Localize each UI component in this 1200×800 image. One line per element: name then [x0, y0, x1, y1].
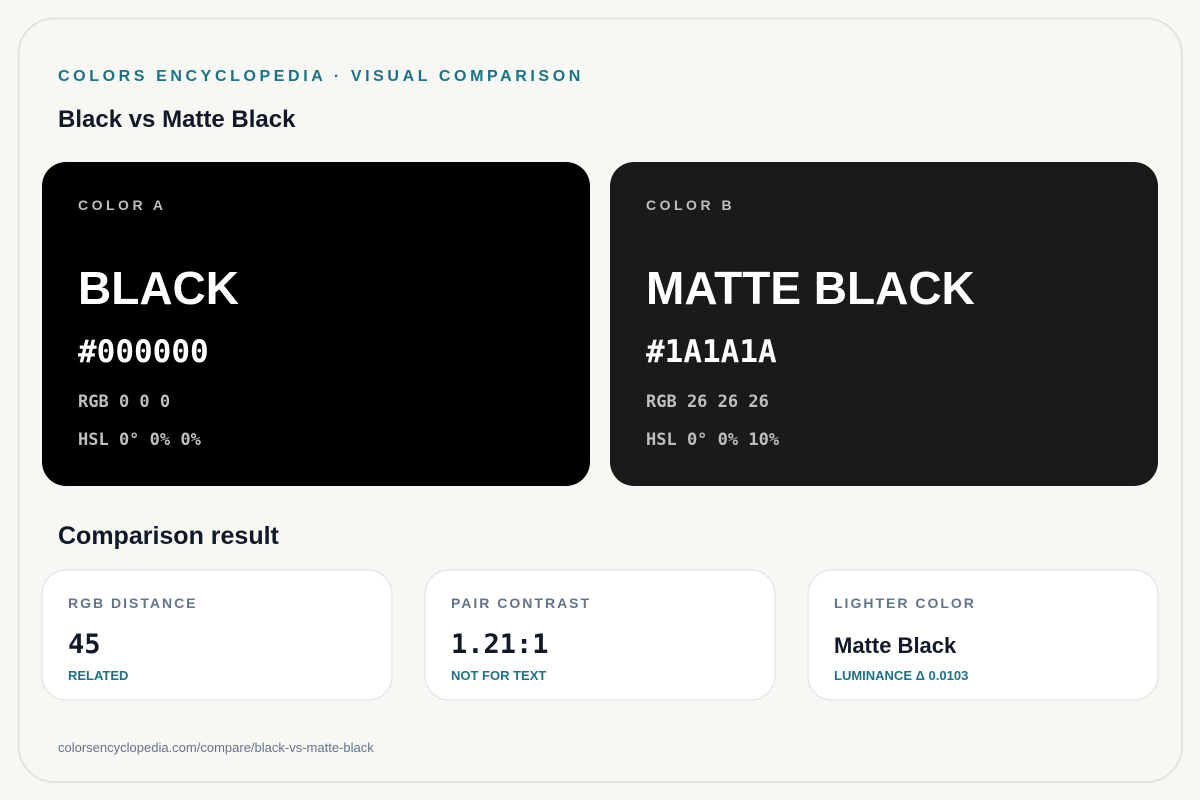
color B HSL: HSL 0° 0% 10%	[646, 430, 779, 450]
card note: RELATED	[68, 668, 128, 683]
color A label: COLOR A	[78, 197, 167, 213]
panel: RGB distance card	[42, 570, 392, 700]
card label: RGB DISTANCE	[68, 595, 198, 611]
card note: LUMINANCE Δ 0.0103	[834, 668, 968, 683]
card value: 45	[68, 629, 101, 660]
card value: Matte Black	[834, 633, 956, 658]
color B hex: #1A1A1A	[646, 334, 777, 370]
card label: PAIR CONTRAST	[451, 595, 591, 611]
eyebrow heading: COLORS ENCYCLOPEDIA · VISUAL COMPARISON	[58, 68, 584, 85]
section heading: Comparison result	[58, 522, 279, 550]
color A name: BLACK	[78, 262, 239, 314]
color A HSL: HSL 0° 0% 0%	[78, 430, 201, 450]
color B RGB: RGB 26 26 26	[646, 392, 769, 412]
color B label: COLOR B	[646, 197, 735, 213]
panel: pair contrast card	[424, 570, 776, 700]
panel: lighter color card	[808, 570, 1158, 700]
card note: NOT FOR TEXT	[451, 668, 546, 683]
footer URL: colorsencyclopedia.com/compare/black-vs-matte-black	[58, 740, 374, 755]
color A hex: #000000	[78, 334, 209, 370]
panel: color B swatch	[610, 162, 1158, 486]
card value: 1.21:1	[451, 629, 549, 660]
title: Black vs Matte Black	[58, 106, 295, 133]
color B name: MATTE BLACK	[646, 262, 975, 314]
card label: LIGHTER COLOR	[834, 595, 976, 611]
color A RGB: RGB 0 0 0	[78, 392, 170, 412]
panel: color A swatch	[42, 162, 590, 486]
